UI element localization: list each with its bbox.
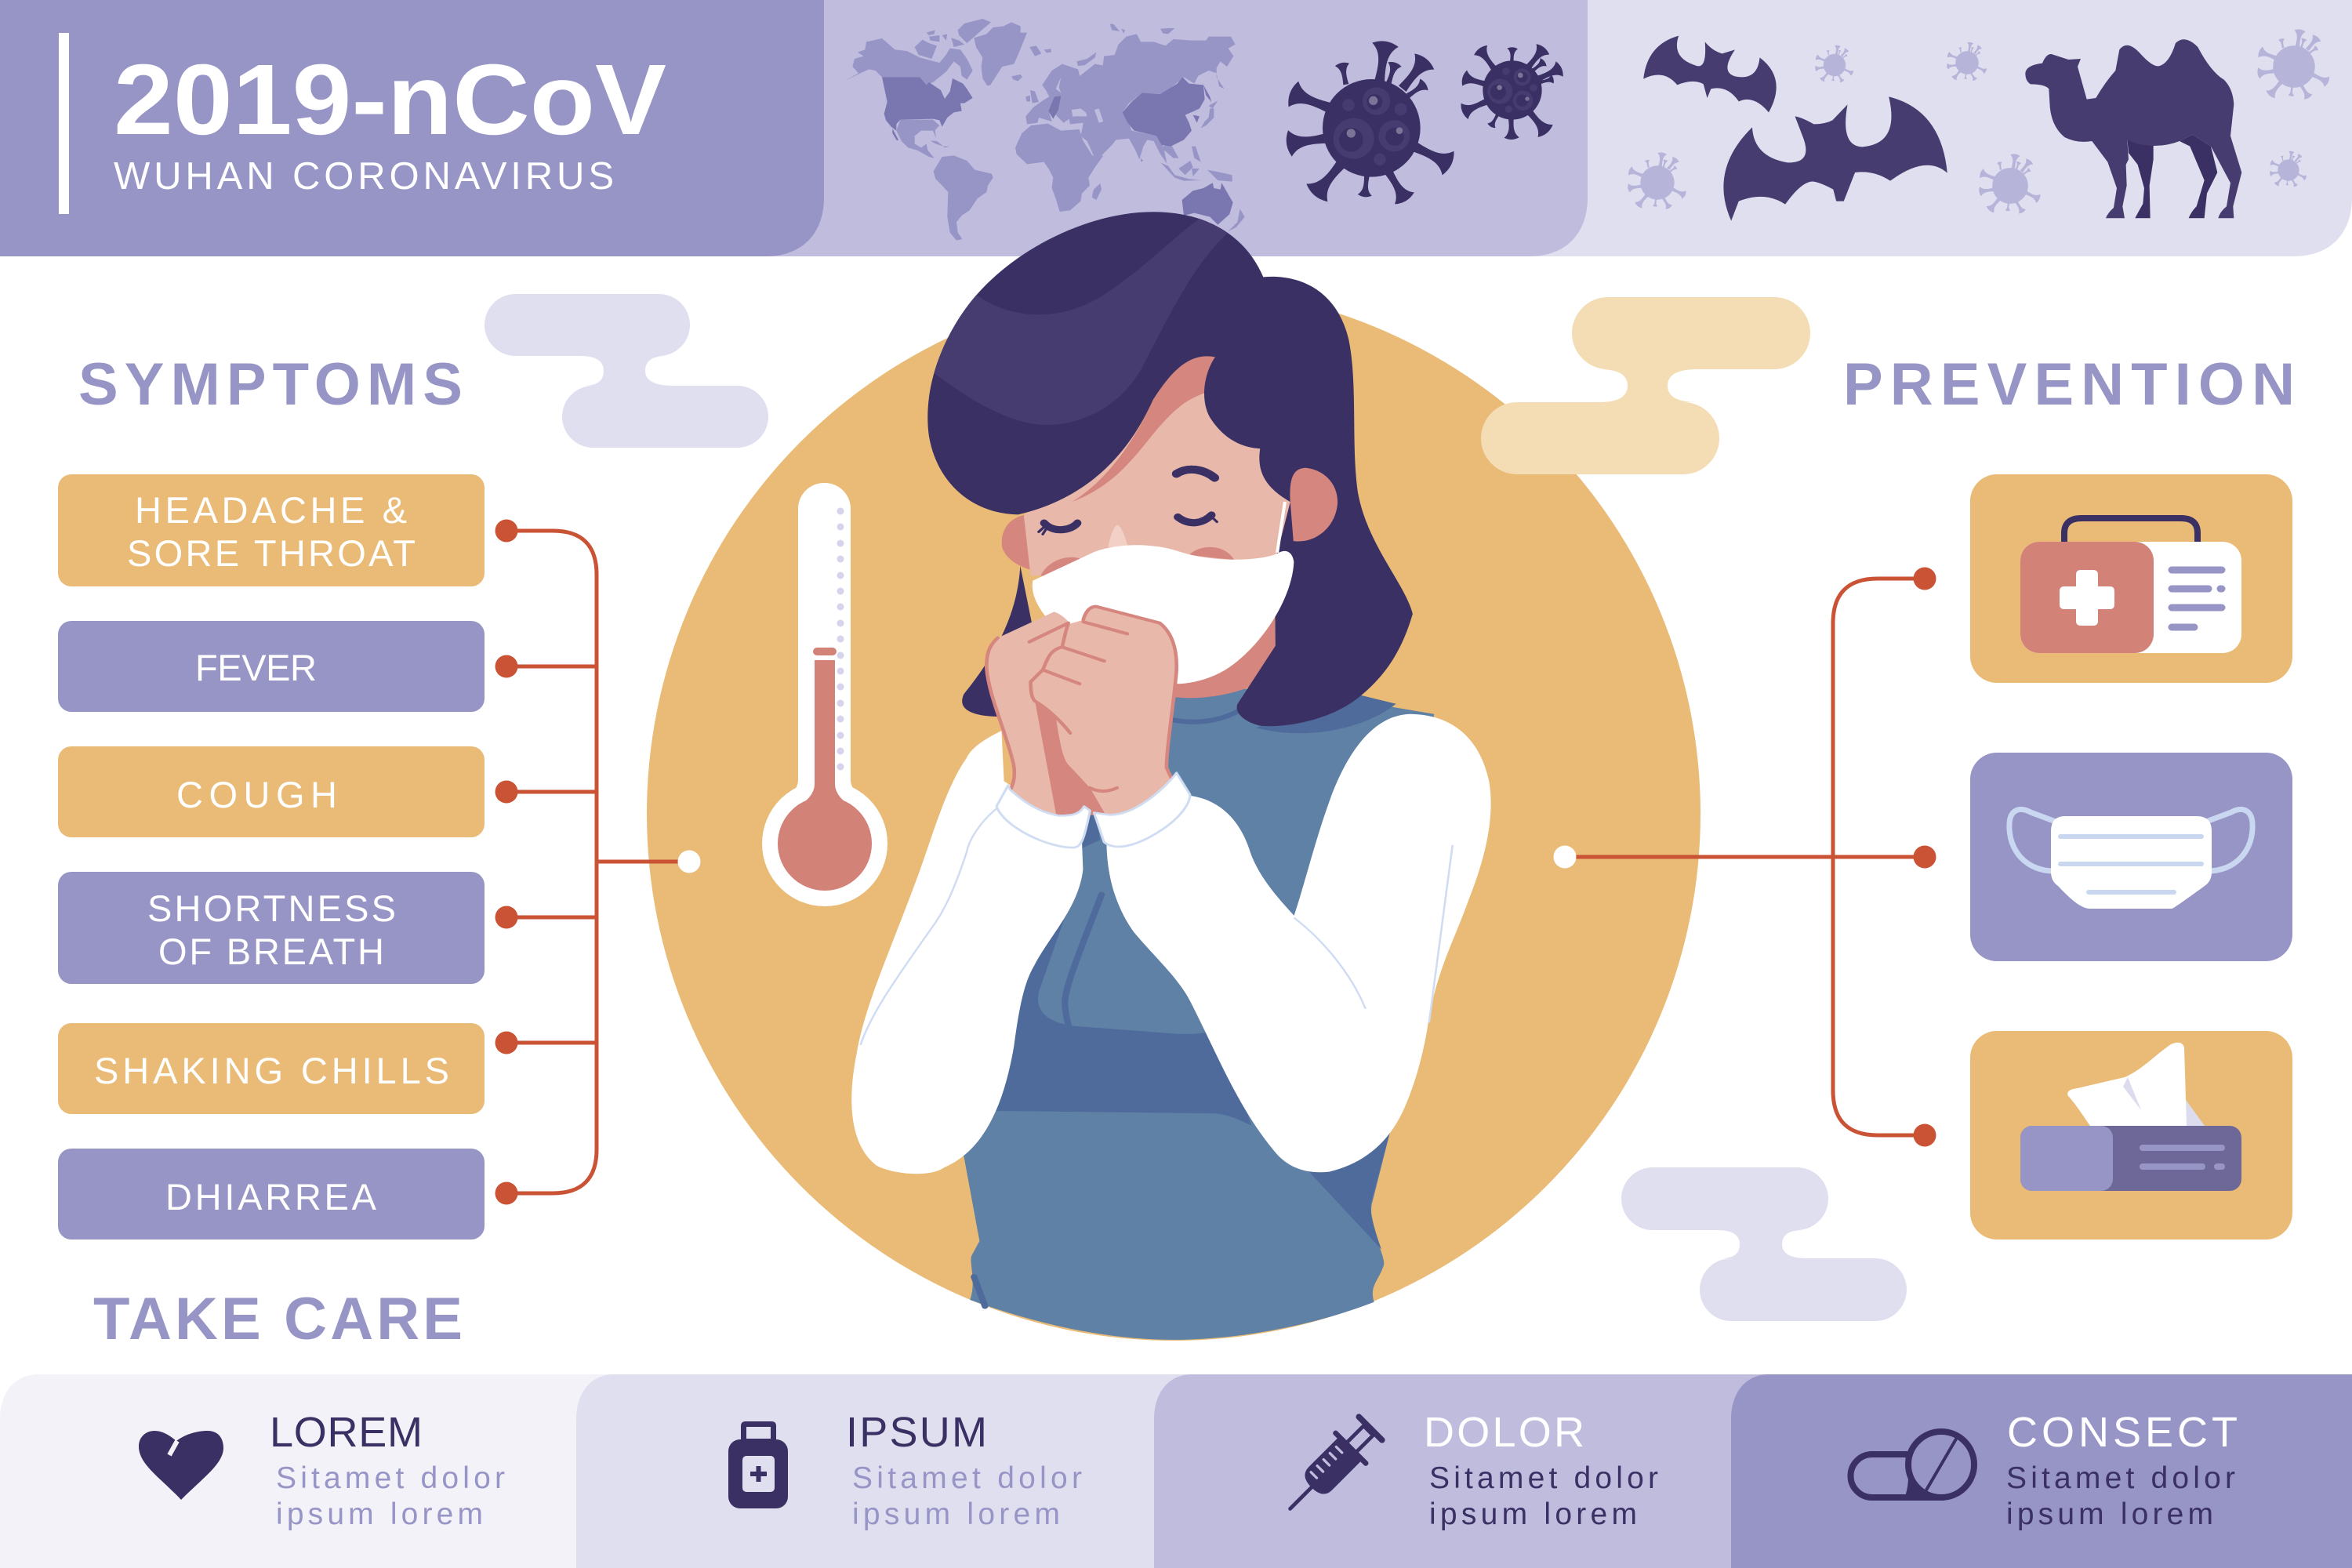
header panel: animal sources (0, 0, 2352, 256)
symptom: shortness of breath: OF BREATH (158, 931, 384, 972)
symptom: shaking chills (58, 1023, 485, 1114)
symptom: dhiarrea (58, 1149, 485, 1240)
label: dolor (1424, 1409, 1658, 1531)
woman coughing with mask (851, 212, 1491, 1340)
icon: heart (139, 1431, 223, 1500)
label: consect: Sitamet dolor (2006, 1461, 2235, 1495)
heading: prevention: PREVENTION (1843, 351, 2295, 418)
bottom panel: ipsum (576, 1374, 1215, 1568)
icon: pills (1850, 1432, 1974, 1501)
label: consect: ipsum lorem (2006, 1497, 2213, 1531)
dress and arms (851, 689, 1491, 1340)
symptom: shortness of breath: SHORTNESS (147, 887, 396, 929)
symptom: cough (58, 746, 485, 837)
title divider (59, 33, 69, 214)
icon: small virus (1459, 42, 1565, 140)
label: ipsum (846, 1409, 1082, 1531)
symptom: cough: COUGH (176, 774, 337, 815)
label: consect (2006, 1409, 2238, 1531)
icon: face mask (2009, 809, 2252, 909)
label: dolor: ipsum lorem (1429, 1497, 1637, 1531)
connector: symptoms bracket (495, 519, 701, 1204)
label: dolor: Sitamet dolor (1429, 1461, 1658, 1495)
big yellow circle (647, 287, 1700, 1341)
icon: large bat (1723, 96, 1947, 221)
icon: light virus 3 (2257, 28, 2331, 100)
head and hair (919, 212, 1413, 733)
cloud: top right (1481, 297, 1810, 474)
label: lorem: ipsum lorem (276, 1497, 483, 1531)
icon: thermometer (762, 483, 887, 906)
cloud: lower right (1621, 1167, 1907, 1321)
label: lorem (270, 1409, 505, 1531)
symptom: shortness of breath (58, 872, 485, 984)
symptom: shaking chills: SHAKING CHILLS (94, 1050, 449, 1091)
clasped hands (986, 607, 1177, 815)
icon: syringe (1272, 1410, 1389, 1527)
connector: prevention bracket (1554, 568, 1936, 1146)
prevention card: face mask (1970, 753, 2292, 961)
icon: light virus 4 (2270, 151, 2307, 187)
icon: small bat (1643, 36, 1777, 112)
label: lorem: Sitamet dolor (276, 1461, 505, 1495)
label: ipsum: Sitamet dolor (852, 1461, 1082, 1495)
heading: take care: TAKE CARE (93, 1286, 463, 1352)
bottom panel: lorem (0, 1374, 627, 1568)
icon: light virus 6 (1978, 154, 2042, 215)
prevention card: first aid kit (1970, 474, 2292, 683)
label: dolor: DOLOR (1424, 1409, 1584, 1456)
header panel: world map and viruses (0, 0, 1588, 256)
icon: large virus (1285, 39, 1457, 207)
subtitle: WUHAN CORONAVIRUS (114, 155, 614, 198)
symptom: headache and sore throat: HEADACHE & (135, 489, 407, 531)
symptom: headache and sore throat (58, 474, 485, 586)
prevention card: tissue box (1970, 1031, 2292, 1240)
label: ipsum: ipsum lorem (852, 1497, 1060, 1531)
label: lorem: LOREM (270, 1409, 423, 1456)
label: consect: CONSECT (2007, 1409, 2238, 1456)
label: ipsum: IPSUM (846, 1409, 987, 1456)
heading: symptoms: SYMPTOMS (78, 351, 463, 418)
symptom: fever (58, 621, 485, 712)
symptom: headache and sore throat: SORE THROAT (127, 532, 416, 574)
world map (845, 19, 1245, 241)
icon: light virus 5 (1627, 152, 1687, 210)
bottom panel: dolor (1154, 1374, 1803, 1568)
icon: light virus 1 (1815, 45, 1854, 83)
back hair left (962, 566, 1036, 717)
sleeve cuffs (996, 773, 1190, 848)
icon: light virus 2 (1947, 42, 1987, 82)
icon: medicine bottle (728, 1421, 788, 1508)
symptom: dhiarrea: DHIARREA (165, 1176, 377, 1218)
face mask on woman (1033, 545, 1294, 684)
header panel: title (0, 0, 824, 256)
title: 2019-nCoV (114, 44, 666, 156)
icon: camel (2025, 39, 2241, 218)
bottom panel: consect (1731, 1374, 2352, 1568)
icon: first aid kit (2020, 518, 2241, 653)
cloud: top left (485, 294, 768, 448)
icon: tissue box (2020, 1043, 2241, 1191)
symptom: fever: FEVER (195, 647, 317, 688)
